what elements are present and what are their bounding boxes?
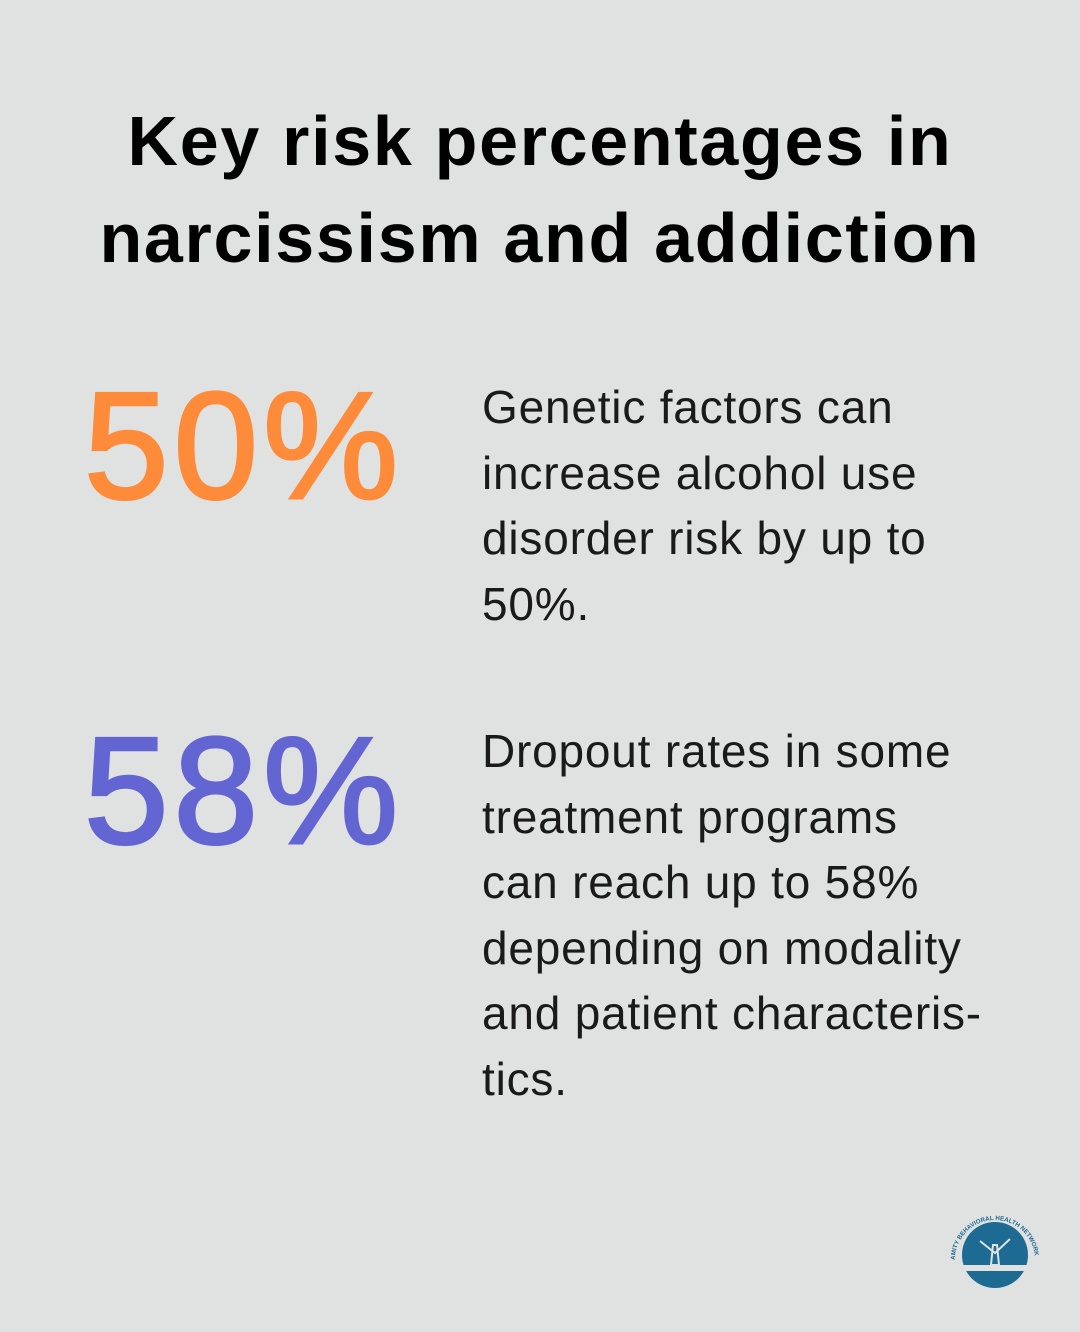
stat: 58%: 58% — [84, 706, 403, 876]
logo — [950, 1216, 1039, 1288]
text: dropout rates: and patient characteris- — [482, 987, 982, 1039]
title — [99, 102, 981, 277]
text: dropout rates — [482, 725, 982, 1105]
text: genetic factors: 50%. — [482, 578, 590, 630]
text: dropout rates: treatment programs — [482, 791, 898, 843]
stat: 50%: 50% — [84, 361, 403, 531]
text: genetic factors: increase alcohol use — [482, 447, 917, 499]
text: dropout rates: depending on modality — [482, 922, 962, 974]
text: genetic factors: Genetic factors can — [482, 381, 894, 433]
text: dropout rates: Dropout rates in some — [482, 725, 951, 777]
text: genetic factors — [482, 381, 927, 630]
text: genetic factors: disorder risk by up to — [482, 512, 927, 564]
text: dropout rates: can reach up to 58% — [482, 856, 919, 908]
text: dropout rates: tics. — [482, 1053, 568, 1105]
logo: AMITY BEHAVIORAL HEALTH NETWORK — [950, 1216, 1039, 1260]
title: narcissism and addiction — [99, 199, 981, 277]
title: Key risk percentages in — [127, 102, 953, 180]
